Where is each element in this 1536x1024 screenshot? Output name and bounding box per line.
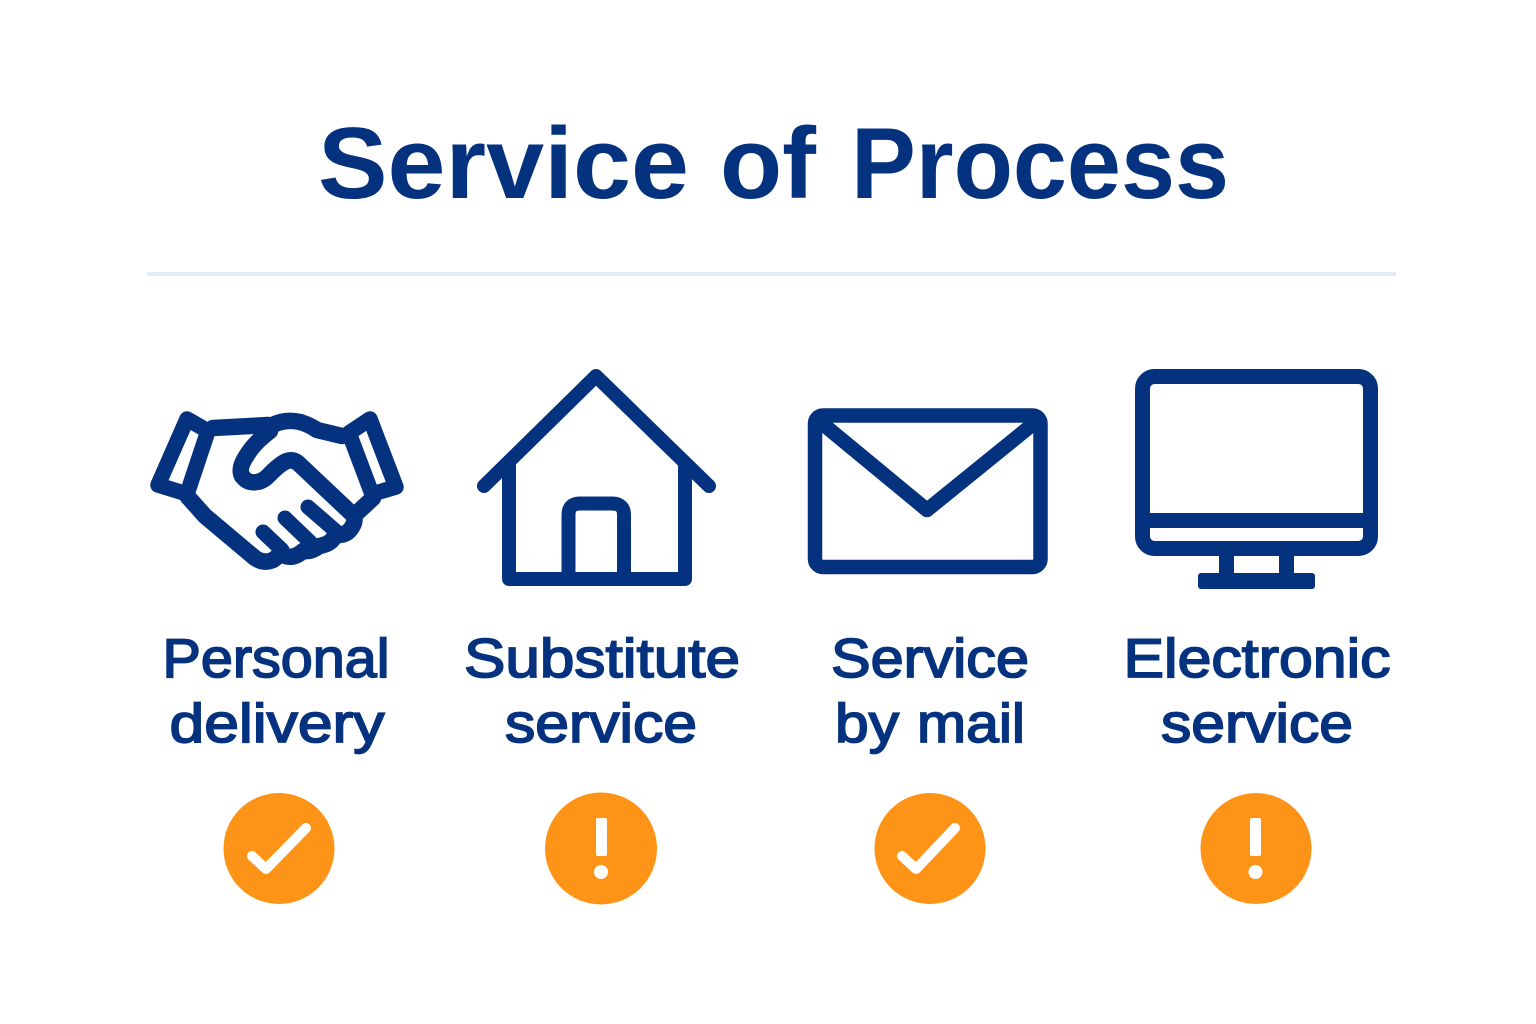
- status: check mark, personal delivery: [224, 793, 334, 904]
- label: electronic service: service: [1161, 692, 1353, 754]
- label: service by mail: Service: [831, 627, 1029, 689]
- label: personal delivery: delivery: [170, 692, 385, 754]
- label: substitute service: [464, 627, 740, 754]
- label: substitute service: Substitute: [464, 627, 740, 689]
- title: [318, 108, 1229, 220]
- label: substitute service: service: [505, 692, 697, 754]
- label: electronic service: Electronic: [1124, 627, 1390, 689]
- label: electronic service: [1124, 627, 1390, 754]
- status: warning, electronic service: [1200, 793, 1312, 904]
- icon: handshake: [158, 419, 396, 562]
- title: Service: [318, 108, 689, 220]
- title: Process: [851, 108, 1229, 220]
- label: personal delivery: Personal: [162, 627, 390, 689]
- label: service by mail: [831, 627, 1029, 754]
- label: service by mail: mail: [917, 692, 1025, 754]
- icon: computer monitor: [1142, 376, 1371, 589]
- label: service by mail: by: [835, 692, 900, 754]
- label: personal delivery: [162, 627, 390, 754]
- status: warning, substitute service: [545, 792, 657, 904]
- status: check mark, service by mail: [874, 793, 986, 904]
- title: of: [720, 108, 816, 220]
- icon: envelope: [815, 416, 1040, 567]
- icon: house: [484, 376, 709, 579]
